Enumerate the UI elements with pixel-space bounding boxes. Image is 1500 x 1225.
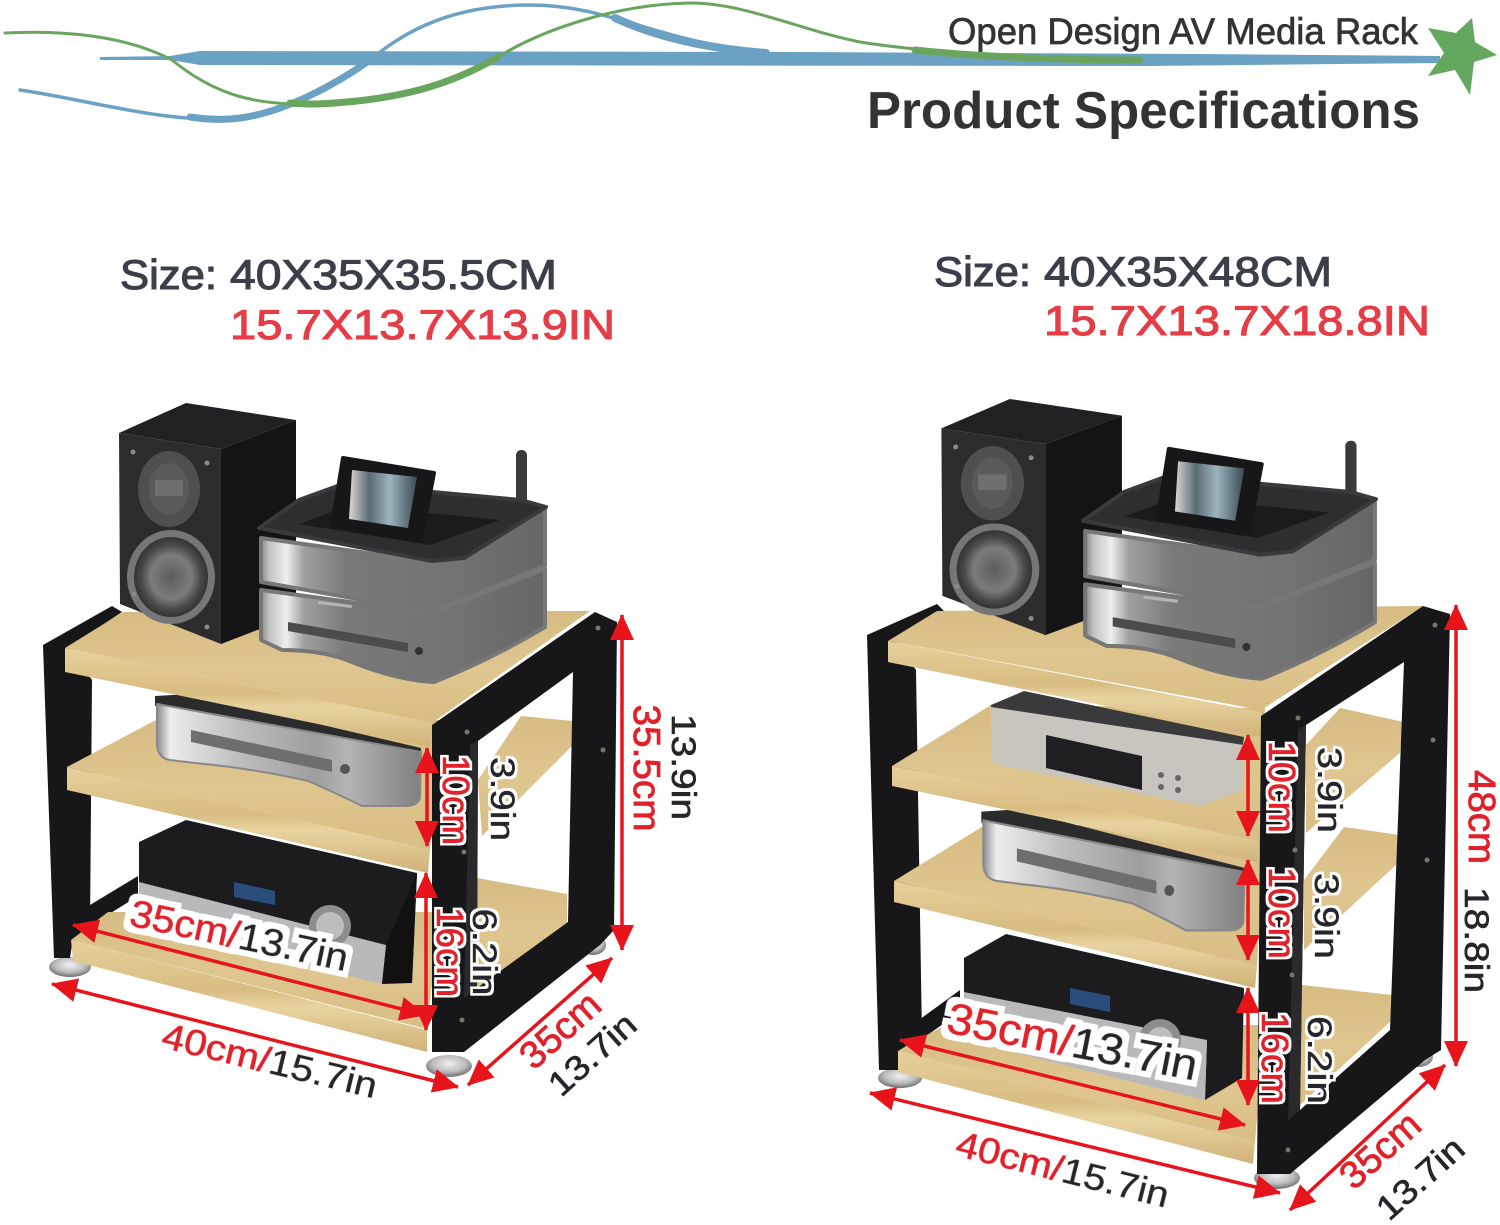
panel: small rack size label: Size: xyxy=(120,251,217,298)
panel: large rack size label: 15.7X13.7X18.8IN xyxy=(1044,297,1430,344)
window shelves on side xyxy=(477,716,573,990)
CD player xyxy=(981,810,1244,930)
label: gap 1 cm: 10cm xyxy=(1260,741,1302,833)
arrow: upper gap xyxy=(1246,735,1250,836)
label: upper gap cm: 10cm xyxy=(434,755,476,845)
speaker xyxy=(941,399,1122,635)
top shelf devices xyxy=(1083,441,1376,679)
header wave graphic xyxy=(5,3,1440,119)
arrow: lower gap xyxy=(1246,988,1250,1105)
label: upper gap in: 3.9in xyxy=(483,757,521,841)
panel: large rack size label xyxy=(934,248,1430,344)
panel: small rack size label: 40X35X35.5CM xyxy=(230,251,557,298)
heading: Product Specifications: Product Specifications xyxy=(867,82,1420,140)
second shelf xyxy=(892,705,1265,862)
label: total height cm: 35.5cm xyxy=(625,704,667,832)
panel: large rack size label: 40X35X48CM xyxy=(1044,248,1332,295)
arrow: width xyxy=(870,1093,1280,1193)
arrow: total height xyxy=(1454,605,1458,1066)
middle shelf xyxy=(67,720,440,873)
bottom shelf xyxy=(898,1025,1265,1164)
label: gap 3 in: 6.2in xyxy=(1300,1016,1338,1104)
window shelves on side xyxy=(1300,708,1404,1105)
arrow: inner depth xyxy=(900,1040,1245,1125)
panel: three-tier rack xyxy=(43,403,617,1077)
panel: four-tier rack xyxy=(867,399,1450,1189)
bottom shelf xyxy=(71,912,440,1052)
label: inner depth: 35cm/13.7in xyxy=(943,994,1202,1090)
label: gap 2 in: 3.9in xyxy=(1307,873,1345,959)
top shelf xyxy=(65,611,590,747)
right frame xyxy=(1254,606,1450,1189)
amplifier xyxy=(139,820,417,984)
label: width: 40cm/15.7in xyxy=(158,1015,382,1106)
panel: small rack size label xyxy=(120,251,615,348)
third shelf xyxy=(894,825,1265,988)
arrow: lower gap xyxy=(424,873,428,1030)
label: side depth in: 13.7in xyxy=(541,1005,644,1104)
CD receiver xyxy=(991,691,1244,806)
label: lower gap in: 6.2in xyxy=(465,908,503,996)
icon: green star xyxy=(1428,18,1497,95)
back feet, rails and left leg xyxy=(43,606,606,977)
arrow: upper gap xyxy=(425,748,429,846)
label: lower gap cm: 16cm xyxy=(428,907,470,997)
amplifier xyxy=(964,934,1244,1100)
label: total height in: 18.8in xyxy=(1457,887,1495,993)
label: gap 3 cm: 16cm xyxy=(1253,1012,1295,1104)
back feet, rails and left leg xyxy=(867,604,1433,1088)
label: gap 2 cm: 10cm xyxy=(1260,867,1302,959)
label: total height in: 13.9in xyxy=(664,714,702,820)
arrow: width xyxy=(52,984,458,1087)
arrow: inner depth xyxy=(73,925,425,1015)
panel: large rack size label: Size: xyxy=(934,248,1031,295)
top shelf devices xyxy=(259,450,546,682)
CD player xyxy=(155,694,421,806)
arrow: side depth xyxy=(1290,1065,1445,1210)
label: side depth cm: 35cm xyxy=(1332,1104,1430,1198)
product name: Open Design AV Media Rack xyxy=(948,11,1418,52)
panel: small rack size label: 15.7X13.7X13.9IN xyxy=(230,301,615,348)
label: gap 1 in: 3.9in xyxy=(1310,747,1348,833)
arrow: middle gap xyxy=(1246,860,1250,960)
right frame xyxy=(426,612,617,1077)
label: side depth cm: 35cm xyxy=(512,984,610,1078)
top shelf xyxy=(888,606,1423,737)
dimensions: three-tier rack xyxy=(52,615,702,1106)
arrow: total height xyxy=(620,615,624,950)
speaker xyxy=(119,403,296,644)
dimensions: four-tier rack xyxy=(870,605,1500,1225)
label: width: 40cm/15.7in xyxy=(952,1123,1174,1216)
arrow: side depth xyxy=(468,958,612,1085)
label: inner depth: 35cm/13.7in xyxy=(126,893,352,980)
